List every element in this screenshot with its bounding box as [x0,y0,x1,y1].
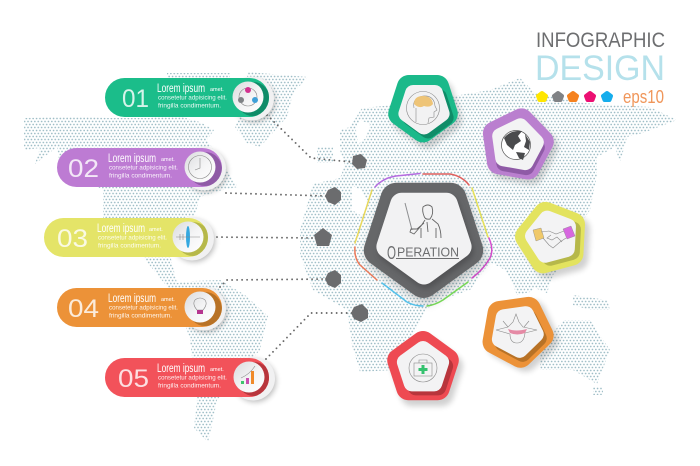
text block: Lorem ipsum [108,153,156,165]
panel: 01 [105,76,275,122]
text block: amet. [161,157,175,163]
label: operation: O [387,243,396,263]
connector: 03 [212,228,332,246]
number: 01 [122,85,149,113]
icon: clock [188,156,212,178]
text block: consetetur adpisicing elit. [98,234,167,242]
pentagon: airplane [487,298,555,364]
text block: Lorem ipsum [97,223,145,235]
text block [157,83,227,110]
text block: fringilla condimentum. [109,312,172,320]
text block [108,153,178,180]
title: infographic design: INFOGRAPHIC [536,29,665,52]
text block [157,363,227,390]
text block: consetetur adpisicing elit. [158,374,227,382]
title: infographic design: DESIGN [535,49,665,88]
text block: Lorem ipsum [157,83,205,95]
centre: operation [355,174,492,306]
text block: amet. [210,367,224,373]
icon: medical kit [409,354,437,382]
number: 02 [68,155,99,183]
number: 04 [68,295,99,323]
connector: 04 [220,270,341,288]
number: 05 [118,365,149,393]
text block: fringilla condimentum. [158,382,221,390]
text block: fringilla condimentum. [98,242,161,250]
pentagon: medical kit [399,343,451,394]
text block [97,223,167,250]
text block: consetetur adpisicing elit. [158,94,227,102]
colour swatches [538,93,611,100]
icon: brain [406,92,440,124]
panel: 05 [105,356,276,402]
eps10 label: eps10 [623,87,664,107]
panel: 02 [57,146,227,192]
text block: consetetur adpisicing elit. [109,304,178,312]
connector: 01 [267,115,367,169]
icon: compass [176,226,200,248]
text block: amet. [161,297,175,303]
label: operation [387,243,459,263]
text block: Lorem ipsum [108,293,156,305]
white pentagon [388,204,460,273]
panel: 03 [44,216,215,262]
shadow and dark pentagon [380,199,470,287]
dotted world map [24,72,677,442]
pentagon: brain [400,87,450,136]
icon: globe [502,130,530,160]
label: operation: PERATION [397,244,459,260]
icon: bar chart [241,366,255,384]
text block: Lorem ipsum [157,363,205,375]
icon: handshake [533,226,575,248]
icon: airplane [496,314,537,343]
panel: 04 [57,286,227,332]
title: infographic design [535,29,665,88]
connector: 02 [226,187,341,205]
pentagon: handshake [523,208,585,269]
rainbow ring [355,174,492,306]
text block: fringilla condimentum. [158,102,221,110]
connector: 05 [266,304,368,359]
icon: presenter [405,203,441,238]
pentagon: globe [490,116,549,174]
text block [108,293,178,320]
text block: amet. [210,87,224,93]
text block: consetetur adpisicing elit. [109,164,178,172]
text block: fringilla condimentum. [109,172,172,180]
icon: team [238,87,258,106]
icon: light bulb [194,298,206,314]
text block: amet. [149,227,163,233]
number: 03 [57,225,88,253]
